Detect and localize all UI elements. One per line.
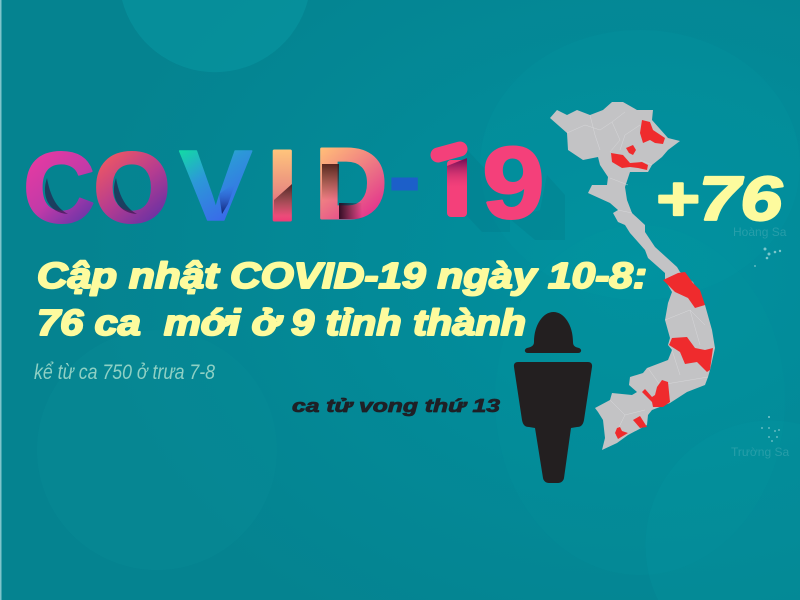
COVID-19 logo [26,142,542,224]
infected provinces [611,120,713,439]
letter C inner shade [45,178,68,214]
icon: person silhouette [514,312,592,483]
letter V: V [179,131,252,242]
letter D folds [322,164,362,219]
letter C: C [23,132,95,244]
subheading: kể từ ca 750 ở trưa 7-8 [34,361,215,384]
Hoàng Sa label and islands [733,225,787,267]
letter I: I [267,131,298,242]
+76 counter: +76 [655,165,783,234]
province borders [567,112,708,435]
headline line 1: Cập nhật COVID-19 ngày 10-8: [37,255,647,296]
land [550,102,715,450]
digit 1 [430,142,468,217]
letter I fold [274,184,292,216]
letter O inner shade [114,178,137,214]
digit 1: 1 [416,127,494,238]
letter D: D [315,128,387,240]
death note: ca tử vong thứ 13 [292,396,500,416]
letter O: O [93,132,171,244]
letter V inner shade [219,182,236,214]
Trường Sa label and islands: Trường Sa [731,445,789,459]
hyphen: - [388,120,421,232]
Hoàng Sa label and islands: Hoàng Sa [733,225,787,239]
long shadows behind 1 and 9 [467,150,565,240]
Trường Sa label and islands [731,416,789,459]
headline line 2: 76 ca mới ở 9 tỉnh thành [37,302,526,343]
map of Vietnam [550,102,715,450]
headline [37,255,647,343]
digit 9: 9 [482,126,545,240]
